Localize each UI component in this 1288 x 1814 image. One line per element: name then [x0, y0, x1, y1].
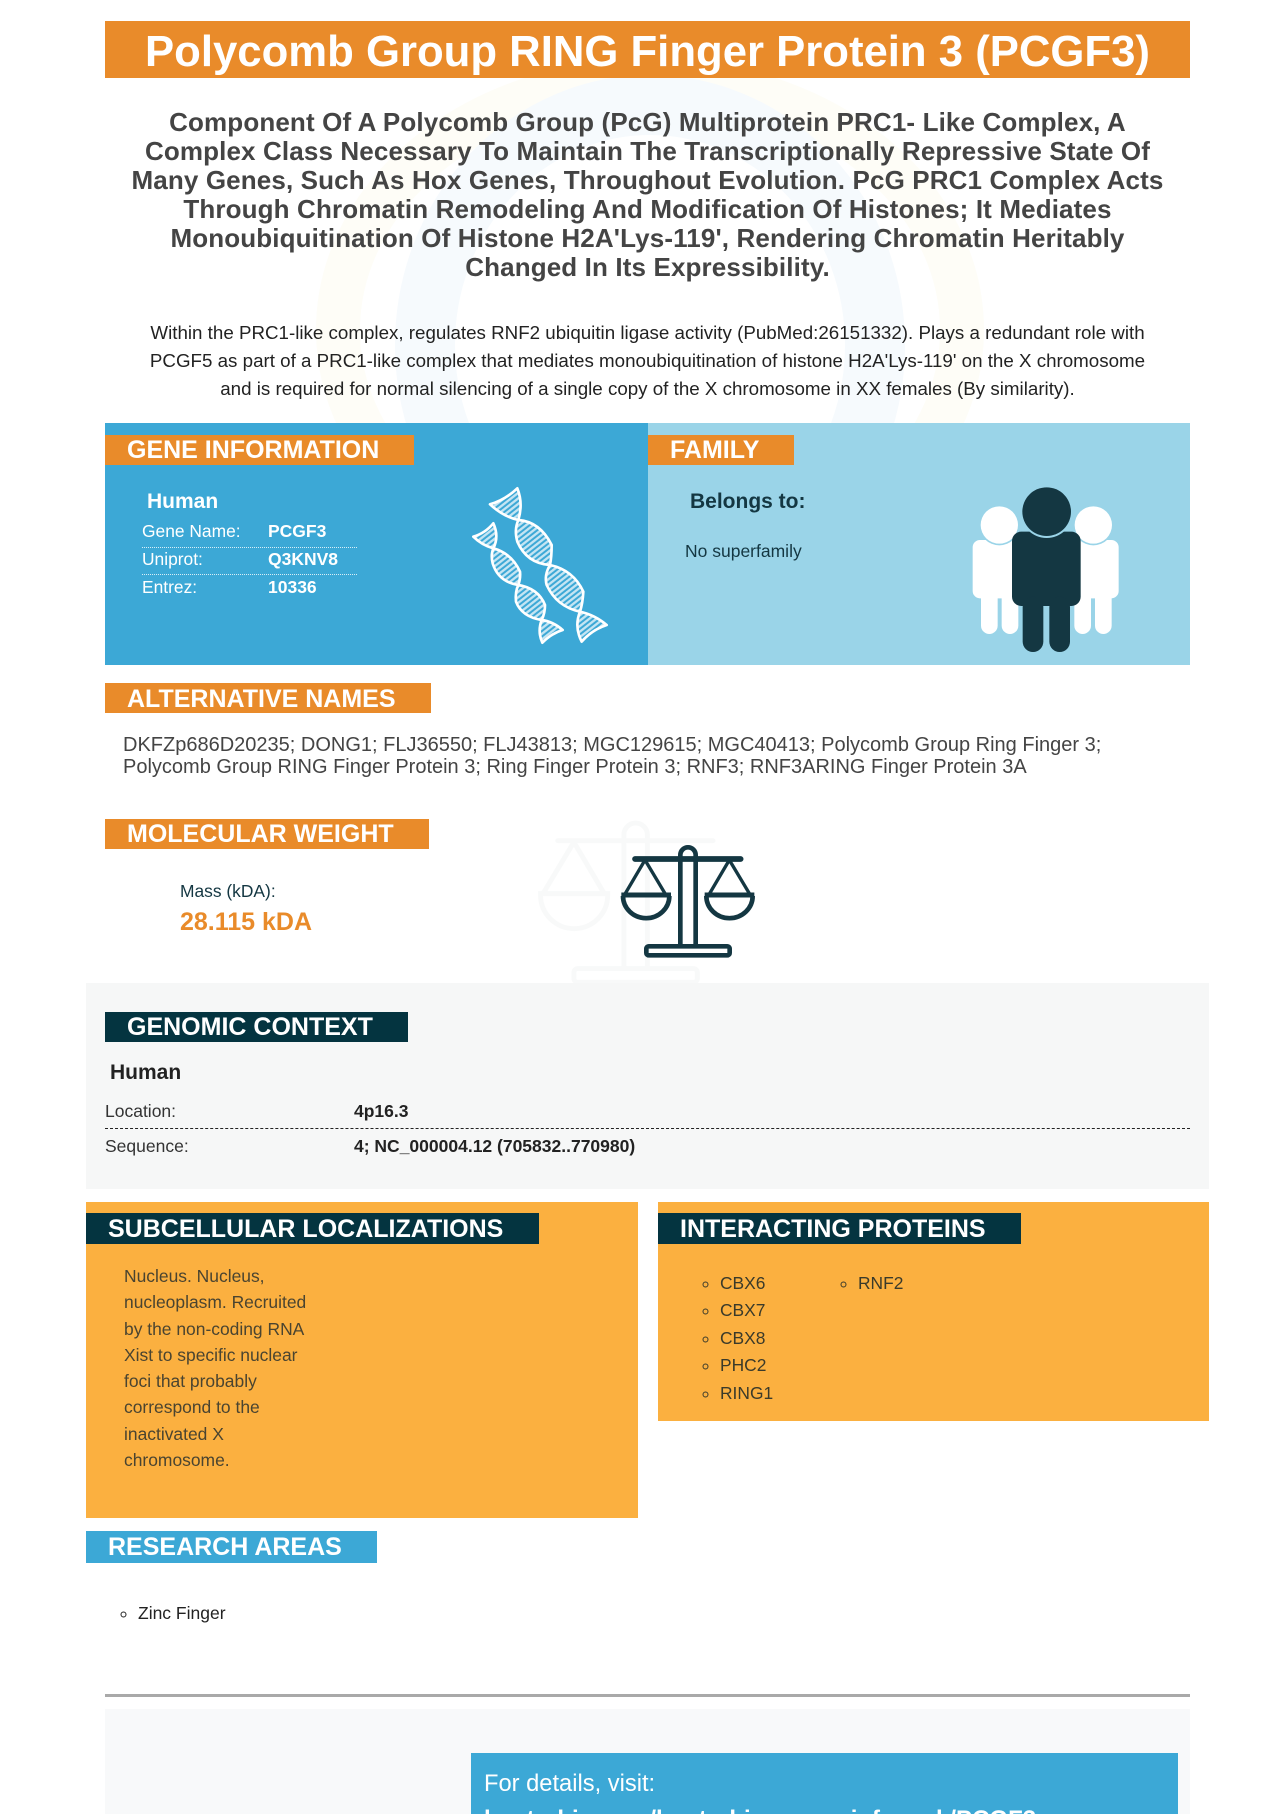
icon: dna: [472, 486, 608, 644]
localization text: Nucleus. Nucleus,: [124, 1266, 265, 1286]
uniprot row: Uniprot:: [142, 549, 203, 569]
location row: [105, 1099, 1190, 1129]
heading: alternative names: ALTERNATIVE NAMES: [127, 685, 396, 713]
gene name row: Gene Name:: [142, 521, 241, 541]
icon: balance scale: [620, 845, 755, 958]
callout label: For details, visit:: [484, 1771, 655, 1797]
heading: gene information: GENE INFORMATION: [127, 436, 379, 464]
alternative names text: Polycomb Group RING Finger Protein 3; Ring Finger Protein 3; RNF3; RNF3ARING Finger Protein 3A: [123, 756, 1027, 778]
alternative names text: [123, 734, 1101, 778]
localization text: Xist to specific nuclear: [124, 1345, 297, 1365]
gene name row: [142, 519, 357, 548]
panel: family: [648, 423, 1190, 665]
uniprot row: [142, 547, 357, 575]
panel: subcellular localizations: [86, 1202, 638, 1518]
description: and is required for normal silencing of a single copy of the X chromosome in XX females (By similarity).: [220, 378, 1075, 399]
alternative names text: DKFZp686D20235; DONG1; FLJ36550; FLJ43813; MGC129615; MGC40413; Polycomb Group Ring Finger 3;: [123, 734, 1101, 756]
subtitle: [132, 107, 1163, 282]
localization text: inactivated X: [124, 1424, 224, 1444]
description: PCGF5 as part of a PRC1-like complex that mediates monoubiquitination of histone H2A'Lys-119' on the X chromosome: [150, 350, 1145, 371]
location row: 4p16.3: [354, 1101, 408, 1121]
localization text: by the non-coding RNA: [124, 1319, 304, 1339]
panel: interacting proteins: [658, 1202, 1209, 1421]
entrez row: [142, 577, 317, 597]
heading: family: FAMILY: [670, 436, 759, 464]
protein list column 2: RNF2: [858, 1273, 903, 1293]
species label: Human: [147, 490, 218, 513]
localization text: [124, 1266, 306, 1470]
mass value: 28.115 kDA: [180, 908, 312, 936]
panel: footer: [105, 1709, 1190, 1814]
background watermark: [395, 78, 905, 423]
heading: interacting proteins: INTERACTING PROTEINS: [680, 1215, 986, 1243]
protein list column 1: RING1: [720, 1383, 773, 1403]
mass label: Mass (kDA):: [180, 881, 276, 901]
subtitle: Through Chromatin Remodeling And Modification Of Histones; It Mediates: [183, 194, 1112, 224]
entrez row: Entrez:: [142, 577, 197, 597]
localization text: foci that probably: [124, 1371, 257, 1391]
protein list column 1: CBX8: [720, 1328, 765, 1348]
sequence row: [105, 1136, 635, 1156]
protein list column 1: PHC2: [720, 1355, 766, 1375]
callout: details link: [471, 1753, 1178, 1814]
subtitle: Complex Class Necessary To Maintain The Transcriptionally Repressive State Of: [145, 136, 1150, 166]
heading: molecular weight: MOLECULAR WEIGHT: [127, 820, 394, 848]
sequence row: 4; NC_000004.12 (705832..770980): [354, 1136, 635, 1156]
subtitle: Changed In Its Expressibility.: [465, 252, 830, 282]
heading: subcellular localizations: SUBCELLULAR LOCALIZATIONS: [108, 1215, 503, 1243]
subtitle: Component Of A Polycomb Group (PcG) Multiprotein PRC1- Like Complex, A: [169, 107, 1126, 137]
localization text: correspond to the: [124, 1397, 260, 1417]
localization text: nucleoplasm. Recruited: [124, 1292, 306, 1312]
panel: gene information: [105, 423, 648, 665]
description: Within the PRC1-like complex, regulates RNF2 ubiquitin ligase activity (PubMed:26151332). Plays a redundant role with: [150, 322, 1145, 343]
entrez row: 10336: [268, 577, 317, 597]
subtitle: Many Genes, Such As Hox Genes, Throughout Evolution. PcG PRC1 Complex Acts: [132, 165, 1163, 195]
family value: No superfamily: [685, 541, 802, 561]
subtitle: Monoubiquitination Of Histone H2A'Lys-119', Rendering Chromatin Heritably: [170, 223, 1125, 253]
protein list column 1: CBX7: [720, 1300, 765, 1320]
localization text: chromosome.: [124, 1450, 230, 1470]
gene name row: PCGF3: [268, 521, 326, 541]
icon: people: [972, 487, 1119, 652]
heading: research areas: RESEARCH AREAS: [108, 1533, 342, 1561]
uniprot row: Q3KNV8: [268, 549, 338, 569]
protein list column 1: [702, 1273, 773, 1403]
divider: [105, 1694, 1190, 1697]
location row: Location:: [105, 1101, 176, 1121]
description: [150, 322, 1145, 399]
protein list column 1: CBX6: [720, 1273, 765, 1293]
species label: Human: [110, 1061, 181, 1084]
heading: genomic context: GENOMIC CONTEXT: [127, 1013, 373, 1041]
research areas list: Zinc Finger: [138, 1603, 226, 1623]
panel: genomic context: [86, 983, 1209, 1189]
belongs to label: Belongs to:: [690, 490, 806, 513]
sequence row: Sequence:: [105, 1136, 189, 1156]
heading: family: [648, 435, 794, 465]
title: Polycomb Group RING Finger Protein 3 (PCGF3): [145, 27, 1150, 76]
